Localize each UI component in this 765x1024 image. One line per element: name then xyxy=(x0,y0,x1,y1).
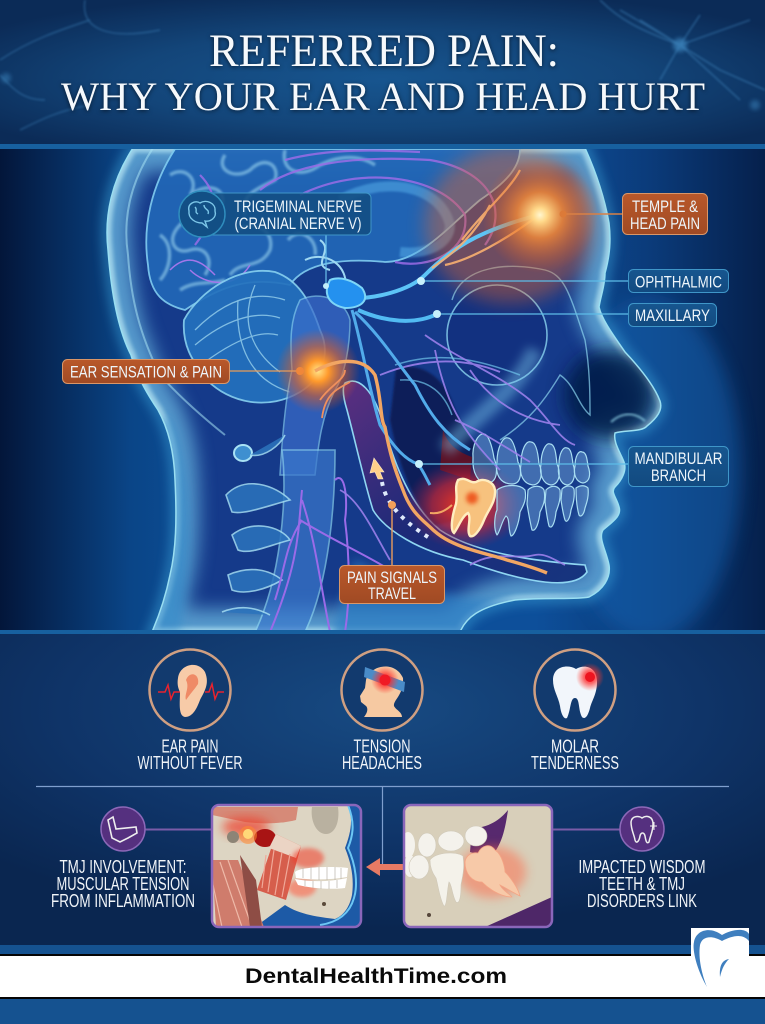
ear pain glow and orange nerve xyxy=(276,329,547,573)
symptom: tension headaches: TENSION xyxy=(354,736,410,756)
symptom: ear pain without fever: EAR PAIN xyxy=(162,736,218,756)
text: impacted wisdom teeth and TMJ link xyxy=(578,857,706,911)
website name: DentalHealthTime.com xyxy=(245,965,507,988)
text: impacted wisdom teeth and TMJ link: IMPACTED WISDOM xyxy=(578,857,706,877)
image: impacted wisdom tooth xyxy=(401,805,552,927)
callout: ophthalmic branch: OPHTHALMIC xyxy=(635,272,722,292)
cerebellum and brain stem xyxy=(184,240,350,475)
text: TMJ involvement: TMJ INVOLVEMENT: xyxy=(60,857,186,877)
symptom: molar tenderness: MOLAR xyxy=(551,736,599,756)
head silhouette xyxy=(107,148,661,640)
callout: mandibular branch: MANDIBULAR xyxy=(634,449,722,468)
callout: pain signals travel: PAIN SIGNALS xyxy=(347,568,437,587)
callout: trigeminal nerve: TRIGEMINAL NERVE xyxy=(234,197,362,216)
footer band xyxy=(0,945,765,1024)
trigeminal nerve branches xyxy=(327,170,535,485)
icon: brain xyxy=(179,191,225,237)
cervical spine xyxy=(222,434,384,630)
callout: maxillary branch: MAXILLARY xyxy=(635,306,710,325)
forehead orange wash xyxy=(425,147,595,303)
callout: maxillary branch xyxy=(433,304,716,326)
text: TMJ involvement: MUSCULAR TENSION xyxy=(56,874,190,894)
temple pain glow xyxy=(482,157,598,273)
title xyxy=(61,25,705,119)
callout: ophthalmic branch xyxy=(417,270,728,292)
symptom: tension headaches xyxy=(342,650,422,773)
logo: tooth xyxy=(691,928,749,987)
text: impacted wisdom teeth and TMJ link: DISORDERS LINK xyxy=(587,891,697,911)
text: TMJ involvement: FROM INFLAMMATION xyxy=(51,891,195,911)
callout: trigeminal nerve xyxy=(179,191,371,289)
symptom: molar tenderness xyxy=(531,650,619,773)
link: TMJ icon xyxy=(101,807,211,851)
symptom: tension headaches: HEADACHES xyxy=(342,753,422,773)
callout: temple and head pain xyxy=(560,194,708,234)
red glow around molar xyxy=(408,462,522,548)
title: WHY YOUR EAR AND HEAD HURT xyxy=(61,74,705,119)
callout: mandibular branch: BRANCH xyxy=(651,466,706,485)
teeth xyxy=(473,434,590,536)
brain xyxy=(146,149,520,310)
callout: ear sensation and pain: EAR SENSATION & PAIN xyxy=(70,362,222,382)
purple facial nerves xyxy=(340,335,575,565)
skull and jaw xyxy=(343,266,590,583)
text: TMJ involvement xyxy=(51,857,195,911)
panel: head anatomy illustration xyxy=(0,147,765,640)
panel: symptoms and links xyxy=(0,630,765,945)
callout: pain signals travel: TRAVEL xyxy=(368,584,416,603)
callout: ear sensation and pain xyxy=(62,360,304,384)
arrow: pain signals travel upward xyxy=(370,458,428,537)
symptom: molar tenderness: TENDERNESS xyxy=(531,753,619,773)
callout: temple and head pain: TEMPLE & xyxy=(632,197,699,216)
icon: impacted molar xyxy=(452,479,495,536)
text: impacted wisdom teeth and TMJ link: TEETH & TMJ xyxy=(599,874,685,894)
header band xyxy=(0,0,765,149)
symptom: ear pain without fever: WITHOUT FEVER xyxy=(138,753,242,773)
link: tooth icon xyxy=(553,807,664,851)
title: REFERRED PAIN: xyxy=(209,25,559,77)
callout: pain signals travel xyxy=(340,501,444,604)
callout: temple and head pain: HEAD PAIN xyxy=(630,214,700,233)
callout: mandibular branch xyxy=(415,446,728,486)
symptom: ear pain without fever xyxy=(138,650,242,773)
callout: trigeminal nerve: (CRANIAL NERVE V) xyxy=(234,214,362,233)
image: TMJ skull and muscle xyxy=(212,805,361,927)
arrow: wisdom teeth to TMJ xyxy=(366,858,403,876)
